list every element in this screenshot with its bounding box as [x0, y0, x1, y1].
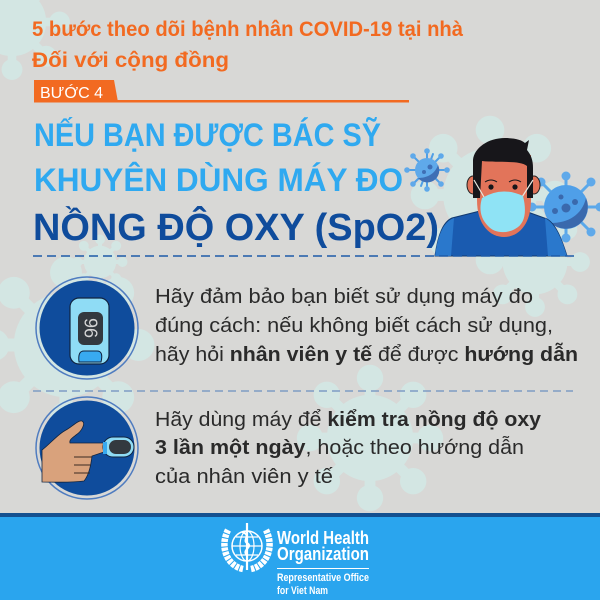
main heading: NỒNG ĐỘ OXY (SpO2)	[33, 204, 439, 249]
WHO wordmark: World Health	[277, 528, 369, 548]
divider	[33, 255, 576, 257]
icon: WHO emblem	[224, 523, 270, 570]
text block: usage	[155, 286, 578, 366]
icon: oximeter device	[36, 277, 138, 379]
footer band	[0, 513, 600, 600]
WHO wordmark: for Viet Nam	[277, 585, 328, 597]
icon: oximeter device: 96	[80, 318, 100, 338]
main heading	[33, 117, 439, 249]
text block: usage: Hãy đảm bảo bạn biết sử dụng máy đo	[155, 286, 533, 308]
text block: usage: đúng cách: nếu không biết cách sử dụng,	[155, 315, 553, 337]
mask	[474, 180, 533, 197]
face	[477, 155, 531, 237]
shirt	[435, 211, 567, 256]
main heading: KHUYÊN DÙNG MÁY ĐO	[34, 162, 403, 198]
WHO wordmark: Organization	[277, 544, 369, 564]
WHO wordmark: Representative Office	[277, 572, 369, 584]
text block: usage: hãy hỏi nhân viên y tế để được hướng dẫn	[155, 342, 578, 366]
step tag: BƯỚC 4	[34, 80, 409, 102]
title: Đối với cộng đồng	[32, 49, 229, 72]
hair	[473, 138, 533, 198]
divider	[33, 390, 573, 392]
icon: man wearing mask	[435, 138, 567, 256]
main heading: NẾU BẠN ĐƯỢC BÁC SỸ	[34, 117, 381, 153]
icon: small virus	[404, 148, 450, 192]
text block: frequency: 3 lần một ngày , hoặc theo hướng dẫn	[155, 436, 524, 459]
title	[32, 18, 463, 72]
eyes	[488, 184, 494, 190]
text block: frequency	[155, 409, 542, 488]
title: 5 bước theo dõi bệnh nhân COVID-19 tại nhà	[32, 18, 463, 41]
step tag: BƯỚC 4: BƯỚC 4	[40, 83, 103, 102]
ears	[467, 176, 479, 194]
text block: frequency: của nhân viên y tế	[155, 466, 333, 488]
WHO wordmark	[277, 528, 369, 597]
icon: large virus	[528, 172, 600, 242]
icon: finger in oximeter	[36, 397, 138, 499]
text block: frequency: Hãy dùng máy để kiểm tra nồng độ oxy	[155, 409, 542, 431]
